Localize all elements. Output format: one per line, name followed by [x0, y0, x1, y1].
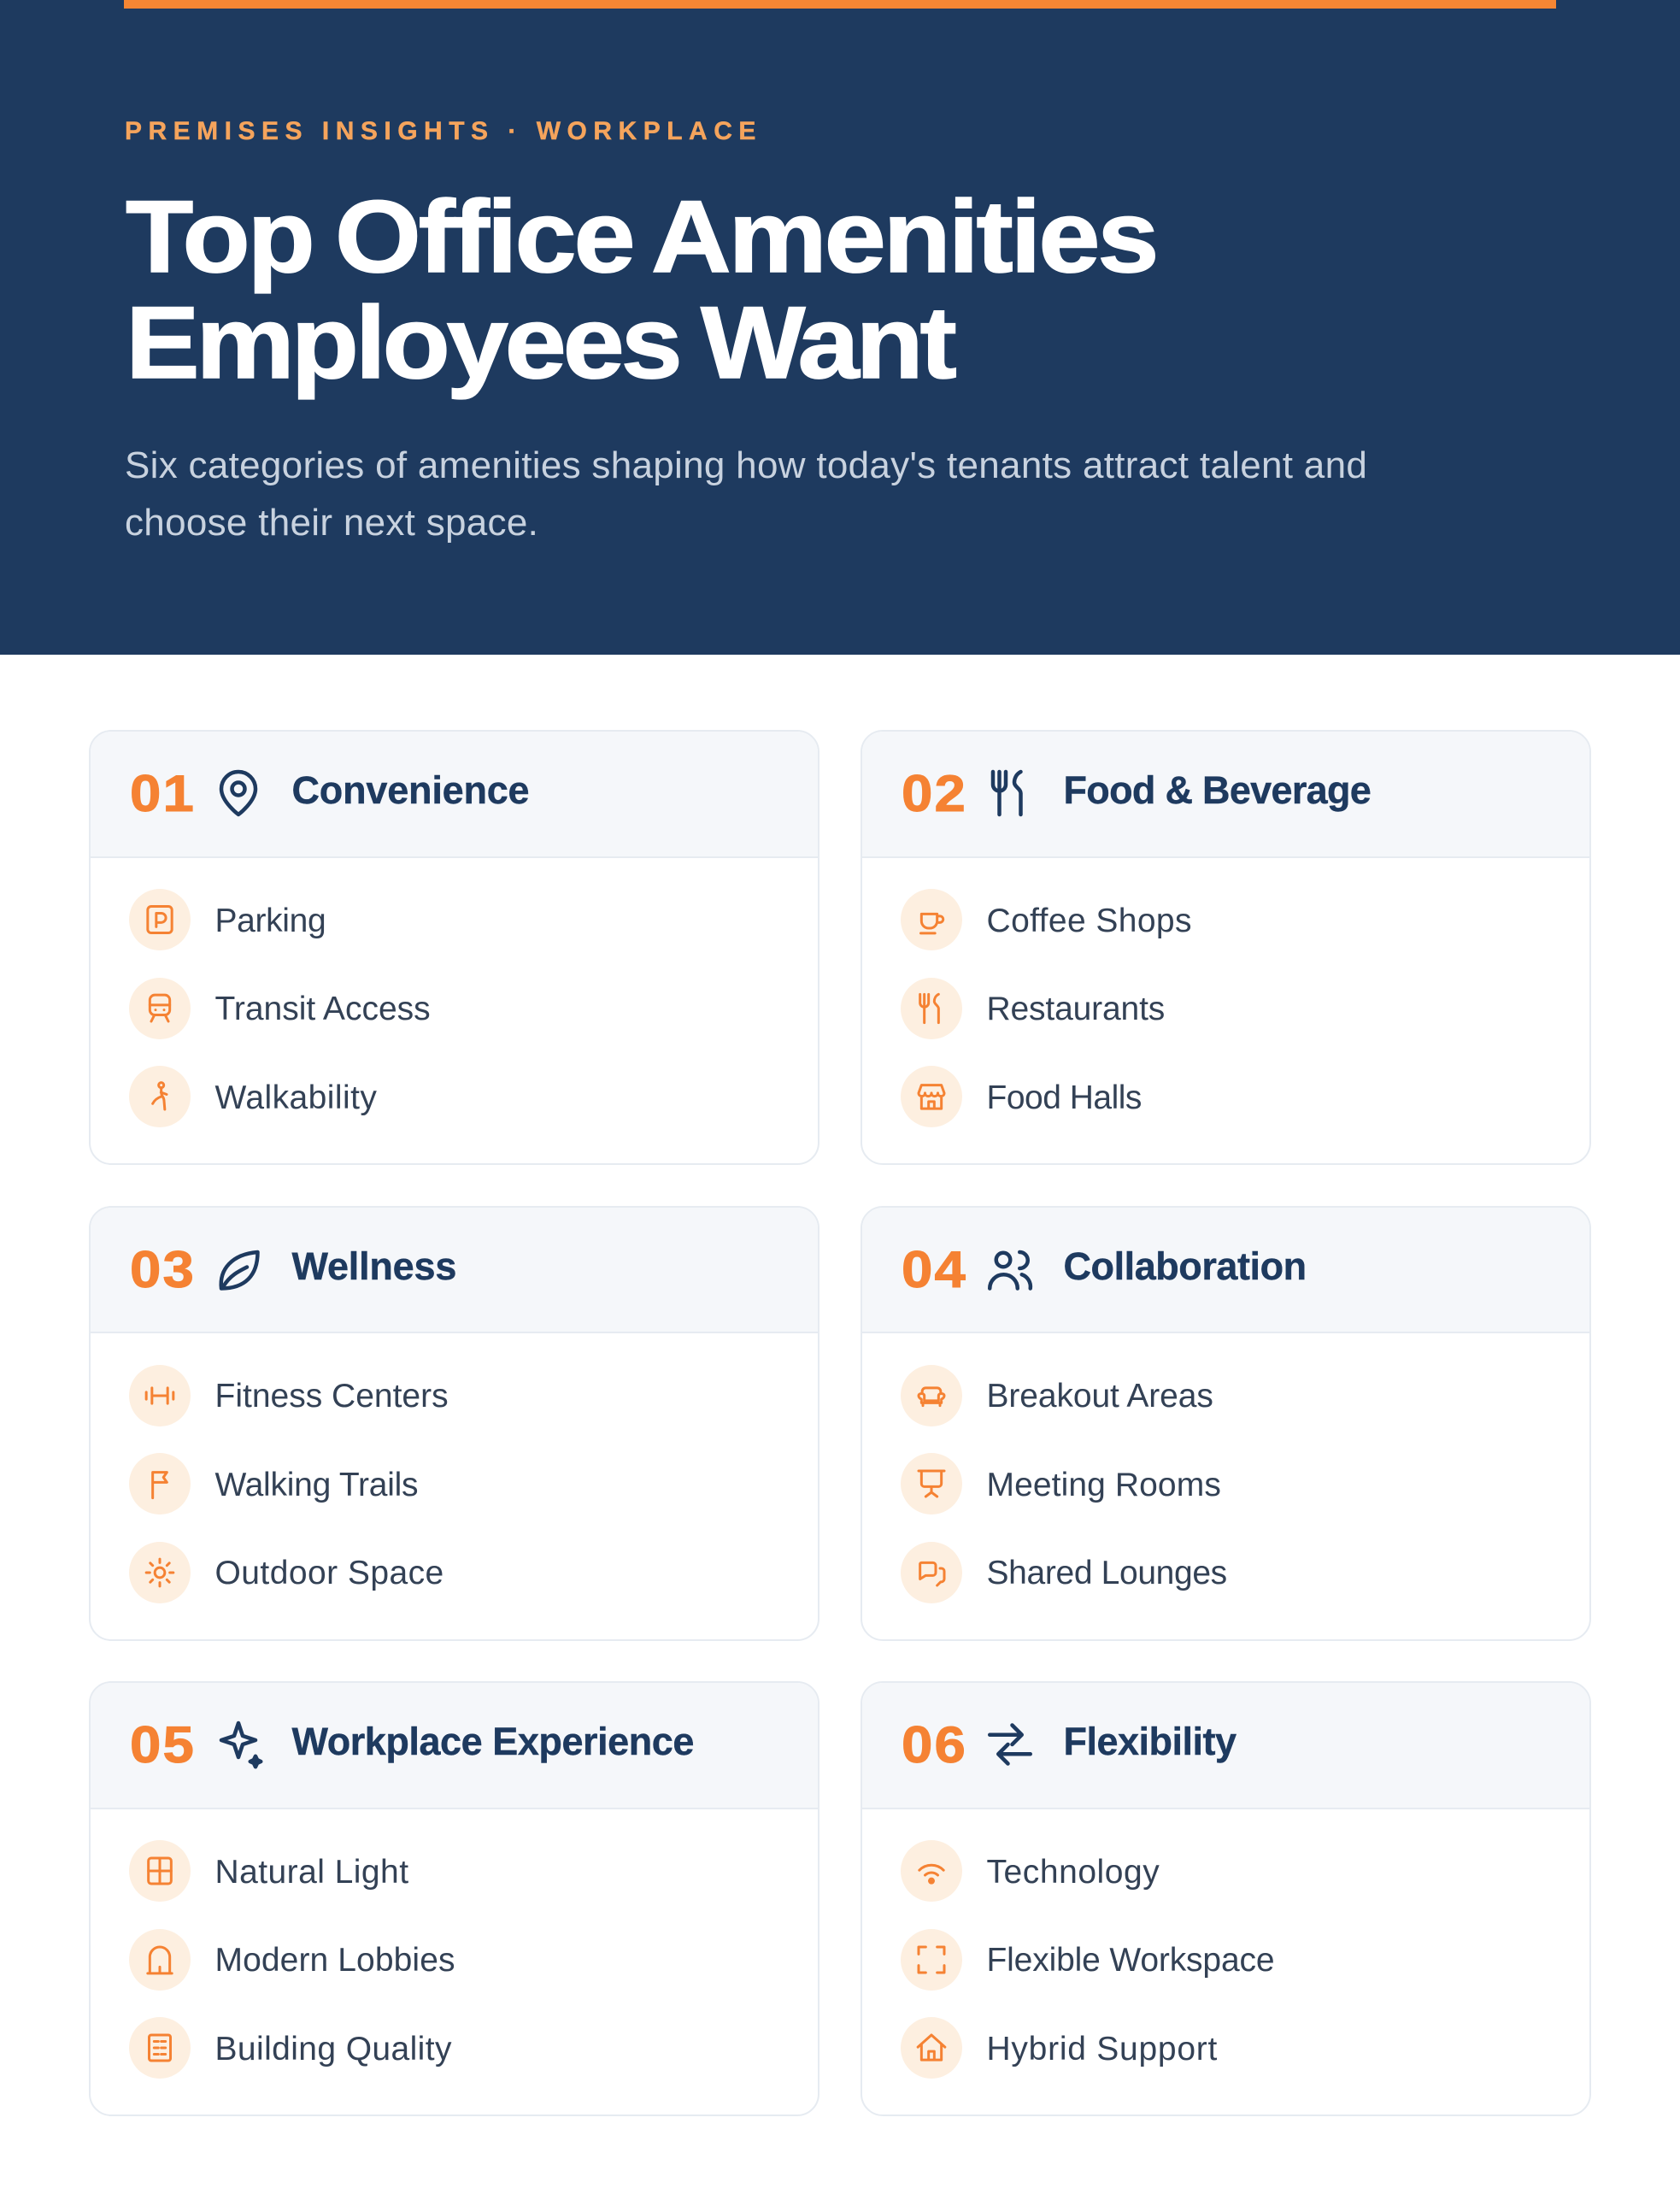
item: Food Halls: [986, 1079, 1142, 1116]
icon: sparkles: [219, 1721, 263, 1769]
panel: 06 Flexibility: [861, 1681, 1591, 2116]
icon: building document: [128, 2017, 190, 2079]
panel: 03 Wellness: [89, 1205, 819, 1641]
icon: parking: [128, 889, 190, 950]
item: Technology: [986, 1853, 1160, 1891]
icon: dumbbell: [128, 1364, 190, 1426]
item: Walking Trails: [215, 1467, 418, 1503]
eyebrow: PREMISES INSIGHTS · WORKPLACE: [125, 117, 762, 145]
icon: train: [128, 978, 190, 1039]
item: Parking: [215, 903, 326, 938]
panel: 05 Workplace Experience: [89, 1681, 819, 2116]
header band: [0, 0, 1680, 655]
icon: coffee cup: [901, 889, 962, 950]
item: Meeting Rooms: [986, 1467, 1221, 1503]
number 06: 06: [902, 1716, 967, 1773]
icon: sun: [128, 1542, 190, 1603]
item: Breakout Areas: [986, 1378, 1213, 1415]
item: Fitness Centers: [215, 1378, 449, 1415]
item: Building Quality: [215, 2031, 452, 2067]
panel: 01 Convenience: [89, 730, 819, 1165]
item: Hybrid Support: [986, 2031, 1218, 2067]
icon: sofa: [901, 1364, 962, 1426]
panel header: [862, 1207, 1589, 1333]
orange accent bar: [124, 0, 1556, 9]
subtitle: Six categories of amenities shaping how today's tenants attract talent and: [125, 444, 1367, 486]
title: [125, 179, 1156, 400]
number 04: 04: [902, 1241, 967, 1297]
heading: Convenience: [292, 768, 529, 812]
panel header: [91, 732, 818, 858]
item: Transit Access: [215, 991, 431, 1027]
icon: house: [901, 2017, 962, 2079]
number 05: 05: [130, 1716, 196, 1773]
item: Outdoor Space: [215, 1555, 444, 1591]
icon: walker: [128, 1066, 190, 1127]
icon: utensils: [901, 978, 962, 1039]
number 02: 02: [902, 765, 967, 822]
subtitle: [125, 444, 1367, 544]
icon: presentation board: [901, 1453, 962, 1515]
icon: store: [901, 1066, 962, 1127]
panel header: [862, 732, 1589, 858]
heading: Wellness: [292, 1244, 456, 1287]
panel header: [862, 1683, 1589, 1809]
title: Employees Want: [125, 285, 953, 400]
panel header: [91, 1683, 818, 1809]
panel header: [91, 1207, 818, 1333]
icon: flag: [128, 1453, 190, 1515]
item: Modern Lobbies: [215, 1942, 455, 1979]
item: Coffee Shops: [986, 903, 1192, 938]
icon: chat bubbles: [901, 1542, 962, 1603]
panel: 02 Food & Beverage: [861, 730, 1591, 1165]
heading: Workplace Experience: [292, 1720, 694, 1763]
heading: Flexibility: [1063, 1720, 1237, 1763]
subtitle: choose their next space.: [125, 502, 538, 544]
panel: 04 Collaboration: [861, 1205, 1591, 1641]
title: Top Office Amenities: [125, 179, 1156, 294]
item: Restaurants: [986, 991, 1165, 1027]
icon: corner brackets: [901, 1928, 962, 1990]
heading: Food & Beverage: [1063, 768, 1371, 812]
icon: people: [988, 1250, 1032, 1291]
item: Natural Light: [215, 1853, 408, 1891]
icon: wifi: [901, 1840, 962, 1902]
item: Flexible Workspace: [986, 1942, 1274, 1979]
item: Walkability: [215, 1079, 377, 1116]
number 01: 01: [130, 765, 196, 822]
icon: map pin: [219, 769, 258, 817]
number 03: 03: [130, 1241, 196, 1297]
icon: utensils: [991, 769, 1023, 817]
item: Shared Lounges: [986, 1555, 1227, 1591]
icon: arched door: [128, 1928, 190, 1990]
icon: swap arrows: [988, 1723, 1032, 1766]
icon: leaf: [219, 1250, 260, 1291]
heading: Collaboration: [1063, 1244, 1307, 1287]
icon: window: [128, 1840, 190, 1902]
